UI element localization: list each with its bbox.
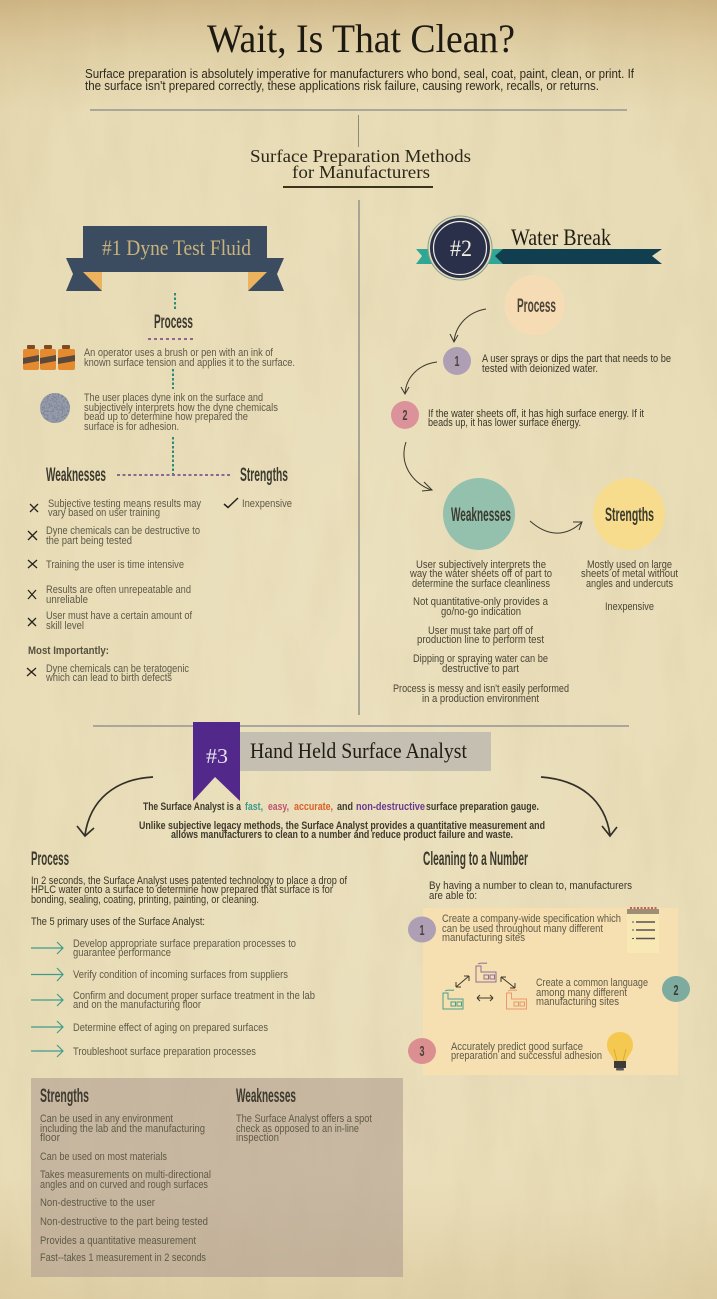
text: process step two: surface is for adhesion. bbox=[84, 421, 179, 433]
list: analyst strengths: Can be used in any environment bbox=[40, 1113, 173, 1125]
text: cleaning intro: are able to: bbox=[429, 890, 477, 902]
list: water break strengths: Mostly used on large bbox=[587, 559, 672, 571]
text: process step two bbox=[84, 392, 278, 433]
step 1 bbox=[443, 347, 671, 375]
banner: #3 hand held surface analyst bbox=[193, 722, 491, 801]
subtitle bbox=[250, 146, 471, 182]
item 1: Create a company-wide specification which bbox=[442, 913, 621, 925]
list: five primary uses: and on the manufacturing floor bbox=[73, 999, 201, 1011]
panel: cleaning to a number bbox=[408, 908, 690, 1075]
intro text: the surface isn't prepared correctly, these applications risk failure, causing rework, recalls, or returns. bbox=[85, 78, 599, 93]
list: water break weaknesses: Dipping or spraying water can be bbox=[413, 653, 548, 665]
text: process description bbox=[31, 875, 348, 928]
list: dyne weaknesses bbox=[27, 498, 201, 684]
panel: method 3 surface analyst bbox=[31, 722, 690, 1277]
list: analyst strengths: angles and on curved and rough surfaces bbox=[40, 1179, 208, 1191]
arrow: step 2 to weaknesses bbox=[404, 442, 432, 491]
list: analyst strengths: including the lab and the manufacturing bbox=[40, 1123, 205, 1135]
list: dyne weaknesses: vary based on user training bbox=[48, 507, 160, 519]
list: analyst weaknesses: check as opposed to an in-line bbox=[236, 1123, 359, 1135]
list: dyne weaknesses: Subjective testing means results may bbox=[48, 498, 201, 510]
text: process description: HPLC water onto a surface to determine how prepared that surface is for bbox=[31, 884, 333, 896]
heading: strengths: Strengths bbox=[240, 465, 288, 486]
list: analyst weaknesses: inspection bbox=[236, 1132, 279, 1144]
title: Wait, Is That Clean? bbox=[207, 16, 515, 61]
list: five primary uses: Verify condition of incoming surfaces from suppliers bbox=[73, 969, 288, 981]
item 1: manufacturing sites bbox=[442, 932, 525, 944]
heading: process: Process bbox=[31, 849, 69, 870]
list: analyst strengths bbox=[40, 1113, 211, 1264]
text: process step one: An operator uses a brush or pen with an ink of bbox=[84, 347, 274, 359]
text: process step two: subjectively interprets how the dyne chemicals bbox=[84, 402, 278, 414]
list: dyne weaknesses: Results are often unrepeatable and bbox=[46, 584, 191, 596]
list: dyne weaknesses: unreliable bbox=[46, 594, 88, 606]
icon: notepad bbox=[627, 908, 659, 953]
list: water break weaknesses: way the water sheets off of part to bbox=[409, 568, 552, 580]
arrow: step 1 to step 2 bbox=[401, 362, 437, 394]
item 3: Accurately predict good surface bbox=[451, 1041, 583, 1053]
list: water break strengths: angles and undercuts bbox=[586, 578, 673, 590]
text: cleaning intro: By having a number to clean to, manufacturers bbox=[429, 880, 632, 892]
item 2: manufacturing sites bbox=[536, 996, 619, 1008]
list: dyne weaknesses: the part being tested bbox=[46, 535, 132, 547]
list: dyne strengths: Inexpensive bbox=[242, 498, 292, 510]
process circle: Process bbox=[517, 296, 556, 317]
banner: #3 hand held surface analyst: Hand Held Surface Analyst bbox=[250, 738, 467, 763]
panel: strengths and weaknesses bbox=[31, 1078, 403, 1277]
list: water break weaknesses: production line to perform test bbox=[417, 634, 544, 646]
list: dyne weaknesses: skill level bbox=[46, 620, 84, 632]
icon: dyne droplet surface bbox=[40, 393, 70, 423]
heading: weaknesses: Weaknesses bbox=[46, 465, 106, 486]
arrow: left curve to process bbox=[77, 777, 153, 836]
list: analyst strengths: Can be used on most materials bbox=[40, 1151, 167, 1163]
intro text bbox=[85, 66, 634, 93]
intro statement: and bbox=[337, 801, 353, 813]
icon: connected factories bbox=[443, 963, 526, 1009]
list: water break weaknesses: Not quantitative-only provides a bbox=[413, 596, 549, 608]
list: water break weaknesses: destructive to part bbox=[442, 663, 519, 675]
item 1: can be used throughout many different bbox=[442, 923, 603, 935]
process circle bbox=[504, 275, 564, 335]
intro statement: easy, bbox=[268, 801, 289, 813]
step 2 bbox=[391, 401, 644, 429]
item 1: 1 bbox=[420, 922, 424, 939]
heading: strengths: Strengths bbox=[40, 1086, 89, 1107]
banner: #2 water break: #2 bbox=[450, 236, 472, 261]
list: water break weaknesses: in a production environment bbox=[422, 693, 539, 705]
list: dyne weaknesses: User must have a certain amount of bbox=[46, 610, 193, 622]
text: process description: The 5 primary uses of the Surface Analyst: bbox=[31, 916, 205, 928]
text: process step two: bead up to determine how prepared the bbox=[84, 411, 248, 423]
list: water break weaknesses: Process is messy and isn't easily performed bbox=[393, 683, 569, 695]
list: dyne weaknesses: which can lead to birth defects bbox=[45, 672, 172, 684]
item 2: among many different bbox=[536, 987, 627, 999]
list: five primary uses: Develop appropriate surface preparation processes to bbox=[73, 938, 296, 950]
list: water break strengths: sheets of metal without bbox=[581, 568, 678, 580]
intro statement: surface preparation gauge. bbox=[426, 801, 539, 813]
arrow: process to step 1 bbox=[450, 309, 486, 342]
list: five primary uses: Confirm and document proper surface treatment in the lab bbox=[73, 990, 315, 1002]
intro statement: accurate, bbox=[294, 801, 333, 813]
text: process step two: The user places dyne ink on the surface and bbox=[84, 392, 263, 404]
text: process step one bbox=[84, 347, 295, 369]
list: analyst strengths: floor bbox=[40, 1132, 60, 1144]
list: water break weaknesses: determine the surface cleanliness bbox=[412, 578, 550, 590]
banner: #1 Dyne Test Fluid bbox=[66, 226, 284, 291]
arrow: weaknesses to strengths bbox=[530, 521, 582, 533]
list: dyne weaknesses: Dyne chemicals can be teratogenic bbox=[46, 663, 189, 675]
heading: process: Process bbox=[154, 312, 193, 333]
step 1: tested with deionized water. bbox=[482, 363, 598, 375]
step 1: 1 bbox=[454, 353, 460, 370]
intro statement: The Surface Analyst is a bbox=[143, 801, 242, 813]
banner: #3 hand held surface analyst: #3 bbox=[206, 744, 228, 768]
weaknesses circle bbox=[443, 478, 515, 550]
list: water break weaknesses bbox=[393, 559, 569, 705]
banner: #2 water break: Water Break bbox=[511, 225, 611, 250]
list: dyne weaknesses: Dyne chemicals can be destructive to bbox=[46, 525, 200, 537]
arrow: right curve to cleaning bbox=[541, 777, 617, 836]
text: process step one: known surface tension and applies it to the surface. bbox=[84, 357, 295, 369]
weaknesses circle: Weaknesses bbox=[451, 505, 511, 526]
list: analyst strengths: Fast--takes 1 measurement in 2 seconds bbox=[40, 1252, 206, 1264]
list: five primary uses: Troubleshoot surface preparation processes bbox=[73, 1046, 256, 1058]
intro statement: allows manufacturers to clean to a number and reduce product failure and waste. bbox=[171, 829, 513, 841]
panel: method 2 water break bbox=[391, 216, 678, 705]
item 3 bbox=[408, 1038, 602, 1064]
text: process description: In 2 seconds, the Surface Analyst uses patented technology to place a drop of bbox=[31, 875, 348, 887]
list: five primary uses bbox=[31, 938, 315, 1058]
banner: #2 water break bbox=[416, 216, 662, 280]
list: five primary uses: guarantee performance bbox=[73, 947, 171, 959]
panel: method 1 dyne test fluid bbox=[23, 226, 295, 684]
list: water break weaknesses: User must take part off of bbox=[428, 625, 534, 637]
list: dyne strengths bbox=[224, 498, 292, 510]
list: dyne weaknesses: Most Importantly: bbox=[28, 645, 109, 657]
intro statement: non-destructive bbox=[356, 801, 425, 813]
item 2: 2 bbox=[674, 982, 678, 999]
subtitle: for Manufacturers bbox=[292, 162, 430, 182]
item 3: 3 bbox=[420, 1043, 424, 1060]
icon: light bulb bbox=[607, 1032, 633, 1070]
subtitle: Surface Preparation Methods bbox=[250, 146, 471, 166]
heading: weaknesses: Weaknesses bbox=[236, 1086, 296, 1107]
list: analyst strengths: Non-destructive to the part being tested bbox=[40, 1216, 208, 1228]
list: five primary uses: Determine effect of aging on prepared surfaces bbox=[73, 1022, 268, 1034]
list: dyne weaknesses: Training the user is time intensive bbox=[46, 559, 184, 571]
item 1 bbox=[408, 913, 621, 944]
intro statement: fast, bbox=[245, 801, 263, 813]
list: analyst weaknesses: The Surface Analyst offers a spot bbox=[236, 1113, 372, 1125]
intro text: Surface preparation is absolutely imperative for manufacturers who bond, seal, coat, paint, clean, or print. If bbox=[85, 66, 634, 81]
step 1: A user sprays or dips the part that needs to be bbox=[482, 353, 671, 365]
item 2 bbox=[536, 976, 690, 1008]
heading: cleaning to a number: Cleaning to a Number bbox=[423, 849, 528, 870]
icon: ink bottles bbox=[23, 345, 75, 370]
list: analyst strengths: Takes measurements on multi-directional bbox=[40, 1169, 211, 1181]
text: process description: bonding, sealing, coating, printing, painting, or cleaning. bbox=[31, 894, 259, 906]
text: cleaning intro bbox=[429, 880, 632, 902]
step 2: beads up, it has lower surface energy. bbox=[428, 417, 581, 429]
list: water break strengths bbox=[581, 559, 678, 613]
item 3: preparation and successful adhesion bbox=[451, 1050, 602, 1062]
intro statement: Unlike subjective legacy methods, the Surface Analyst provides a quantitative measurement and bbox=[139, 820, 545, 832]
item 2: Create a common language bbox=[536, 977, 648, 989]
list: water break strengths: Inexpensive bbox=[605, 601, 654, 613]
strengths circle: Strengths bbox=[605, 505, 654, 526]
strengths circle bbox=[593, 478, 665, 550]
list: water break weaknesses: User subjectively interprets the bbox=[416, 559, 546, 571]
list: analyst weaknesses bbox=[236, 1113, 372, 1144]
banner: #1 Dyne Test Fluid: #1 Dyne Test Fluid bbox=[102, 235, 251, 260]
list: analyst strengths: Non-destructive to the user bbox=[40, 1197, 155, 1209]
step 2: If the water sheets off, it has high surface energy. If it bbox=[428, 408, 644, 420]
list: water break weaknesses: go/no-go indication bbox=[441, 606, 521, 618]
step 2: 2 bbox=[402, 407, 408, 424]
intro statement bbox=[139, 801, 545, 841]
list: analyst strengths: Provides a quantitative measurement bbox=[40, 1235, 196, 1247]
